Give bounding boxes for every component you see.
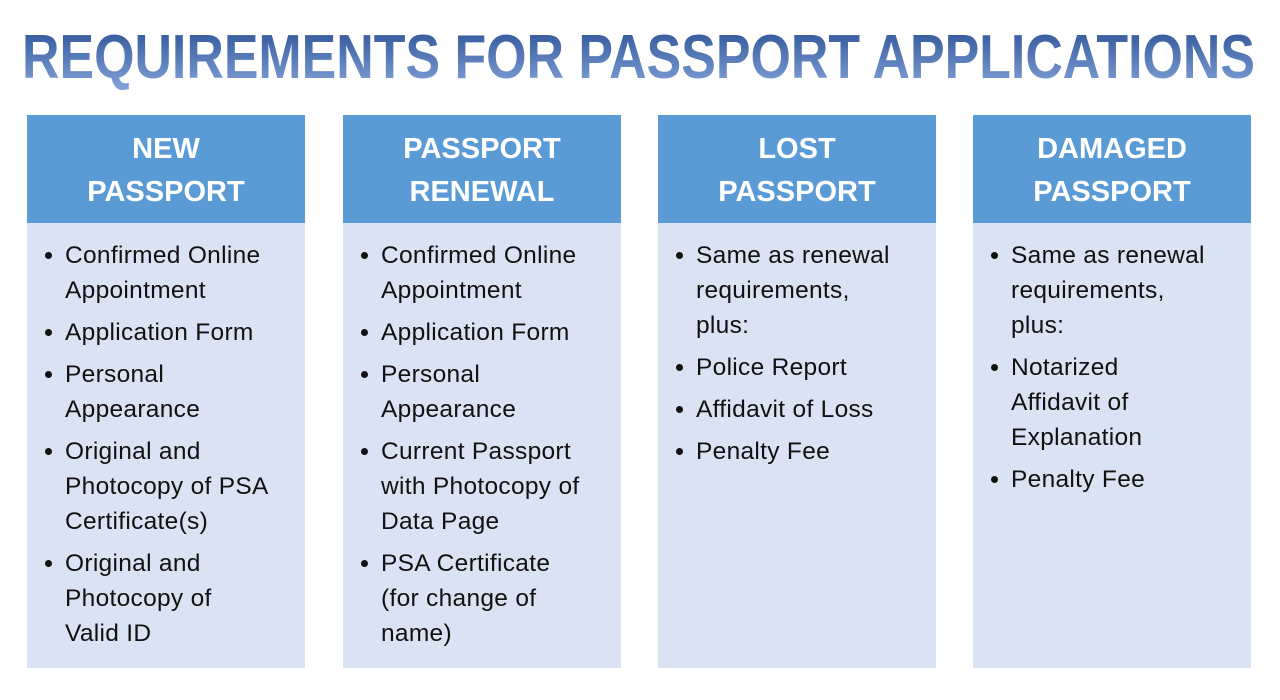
list: renewal requirements: Application Form <box>381 319 570 346</box>
heading: lost passport: PASSPORT <box>718 176 876 208</box>
heading: new passport: PASSPORT <box>87 176 245 208</box>
list: new passport requirements: Application Form <box>65 319 254 346</box>
list: new passport requirements: Confirmed Online <box>65 242 260 269</box>
list: damaged requirements: Penalty Fee <box>1011 466 1145 493</box>
heading: passport renewal <box>343 115 621 223</box>
list: new passport requirements: Appointment <box>65 277 206 304</box>
heading: passport renewal: PASSPORT <box>403 133 561 165</box>
list: damaged requirements: Same as renewal <box>1011 242 1205 269</box>
panel: passport renewal <box>343 115 621 668</box>
list: new passport requirements: Appearance <box>65 396 200 423</box>
heading: damaged passport <box>973 115 1251 223</box>
list: new passport requirements: Personal <box>65 361 164 388</box>
heading: lost passport: LOST <box>758 133 836 165</box>
heading: damaged passport: PASSPORT <box>1033 176 1191 208</box>
heading: new passport: NEW <box>132 133 200 165</box>
list: damaged requirements: plus: <box>1011 312 1064 339</box>
list: renewal requirements: PSA Certificate <box>381 550 550 577</box>
list: damaged requirements: Notarized <box>1011 354 1119 381</box>
list: renewal requirements <box>361 242 580 647</box>
list: new passport requirements <box>45 242 269 647</box>
list: lost requirements: plus: <box>696 312 749 339</box>
list: renewal requirements: Current Passport <box>381 438 571 465</box>
list: lost requirements: Affidavit of Loss <box>696 396 874 423</box>
panel: new passport <box>27 115 305 668</box>
heading: passport renewal: RENEWAL <box>410 176 554 208</box>
list: renewal requirements: Data Page <box>381 508 499 535</box>
list: new passport requirements: Original and <box>65 438 201 465</box>
heading: lost passport <box>658 115 936 223</box>
list: renewal requirements: Personal <box>381 361 480 388</box>
heading: damaged passport: DAMAGED <box>1037 133 1187 165</box>
list: lost requirements: Penalty Fee <box>696 438 830 465</box>
list: renewal requirements: Appearance <box>381 396 516 423</box>
panel: lost passport <box>658 115 936 668</box>
list: new passport requirements: Original and <box>65 550 201 577</box>
list: new passport requirements: Certificate(s) <box>65 508 208 535</box>
heading: new passport <box>27 115 305 223</box>
list: damaged requirements <box>991 242 1205 493</box>
list: renewal requirements: (for change of <box>381 585 536 612</box>
list: lost requirements: requirements, <box>696 277 850 304</box>
list: new passport requirements: Photocopy of PSA <box>65 473 269 500</box>
list: lost requirements <box>676 242 890 465</box>
list: renewal requirements: name) <box>381 620 452 647</box>
list: damaged requirements: Affidavit of <box>1011 389 1129 416</box>
list: damaged requirements: Explanation <box>1011 424 1142 451</box>
list: damaged requirements: requirements, <box>1011 277 1165 304</box>
list: lost requirements: Same as renewal <box>696 242 890 269</box>
list: new passport requirements: Photocopy of <box>65 585 212 612</box>
list: lost requirements: Police Report <box>696 354 847 381</box>
panel: damaged passport <box>973 115 1251 668</box>
list: renewal requirements: Appointment <box>381 277 522 304</box>
list: renewal requirements: Confirmed Online <box>381 242 576 269</box>
list: renewal requirements: with Photocopy of <box>381 473 580 500</box>
list: new passport requirements: Valid ID <box>65 620 151 647</box>
